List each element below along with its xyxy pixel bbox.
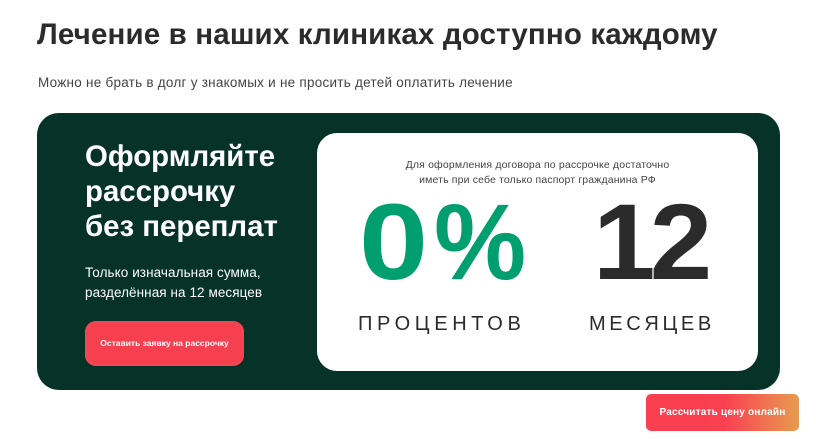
panel heading: без переплат [85, 210, 278, 243]
stat: 12 months: 12 [593, 181, 707, 302]
subtitle: Можно не брать в долг у знакомых и не просить детей оплатить лечение [38, 75, 513, 90]
panel: installment offer [37, 113, 780, 390]
button: calculate price online: Рассчитать цену онлайн [660, 407, 785, 418]
panel description: разделённая на 12 месяцев [85, 285, 262, 300]
panel heading [85, 140, 278, 243]
button: apply for installment [85, 321, 244, 366]
stat: 0 percent: % [434, 181, 526, 302]
panel heading: рассрочку [85, 175, 235, 208]
card note [406, 159, 669, 186]
panel: terms card [317, 133, 758, 371]
stat label: months: МЕСЯЦЕВ [589, 313, 715, 335]
card note: Для оформления договора по рассрочке достаточно [406, 159, 669, 171]
panel description: Только изначальная сумма, [85, 265, 261, 280]
panel heading: Оформляйте [85, 140, 275, 173]
panel description [85, 265, 262, 300]
button: apply for installment: Оставить заявку на рассрочку [100, 338, 229, 348]
stat label: percent: ПРОЦЕНТОВ [358, 313, 525, 335]
card note: иметь при себе только паспорт гражданина РФ [419, 174, 656, 186]
title: Лечение в наших клиниках доступно каждому [37, 18, 718, 51]
stat: 0 percent: 0 [359, 181, 428, 302]
stat: 0 percent [359, 181, 526, 302]
button: calculate price online [646, 394, 799, 431]
